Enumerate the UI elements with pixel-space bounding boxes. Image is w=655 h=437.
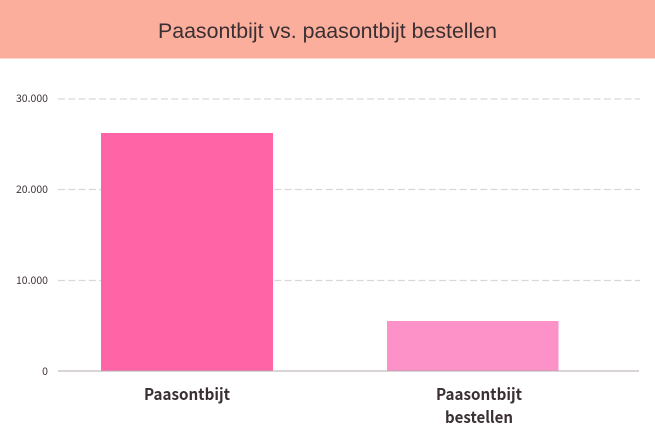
header band [0, 0, 655, 59]
y axis labels: 10.000 [16, 273, 48, 288]
x axis line [58, 370, 639, 372]
bar: Paasontbijt [101, 133, 273, 371]
bar: Paasontbijt bestellen [387, 321, 558, 371]
x label: Paasontbijt bestellen: Paasontbijt [436, 381, 522, 405]
x label: Paasontbijt bestellen [436, 381, 522, 428]
x label: Paasontbijt bestellen: bestellen [445, 404, 513, 428]
title: Paasontbijt vs. paasontbijt bestellen [158, 20, 497, 43]
y axis labels: 20.000 [16, 182, 48, 197]
gridlines [58, 99, 640, 280]
y axis labels: 30.000 [16, 91, 48, 106]
x label: Paasontbijt: Paasontbijt [144, 381, 230, 405]
y axis labels: 0 [42, 364, 48, 379]
y axis labels [16, 91, 48, 379]
